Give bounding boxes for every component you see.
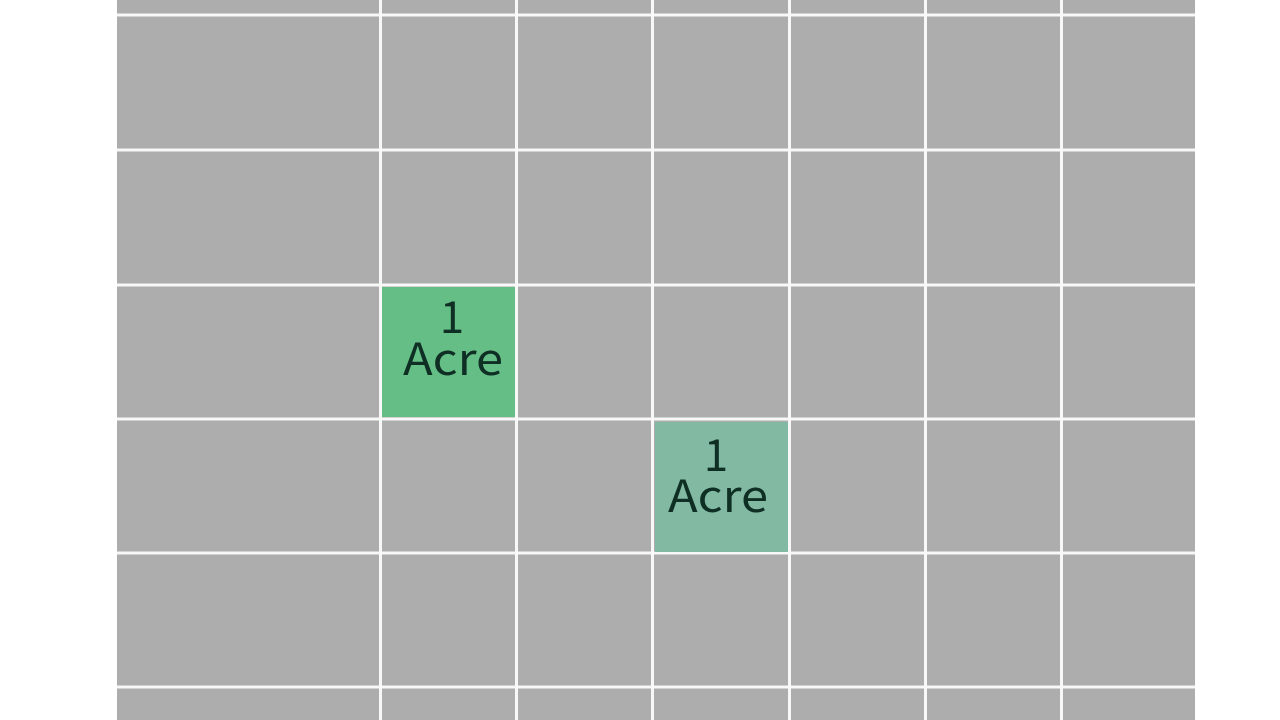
plot: green 1 acre bbox=[382, 282, 515, 417]
plot: green 1 acre: 1 bbox=[440, 282, 464, 346]
plot: green 1 acre: Acre bbox=[403, 324, 503, 388]
plot: teal 1 acre bbox=[655, 420, 788, 552]
plot: teal 1 acre: 1 bbox=[704, 420, 728, 484]
plot: teal 1 acre: Acre bbox=[668, 461, 768, 525]
